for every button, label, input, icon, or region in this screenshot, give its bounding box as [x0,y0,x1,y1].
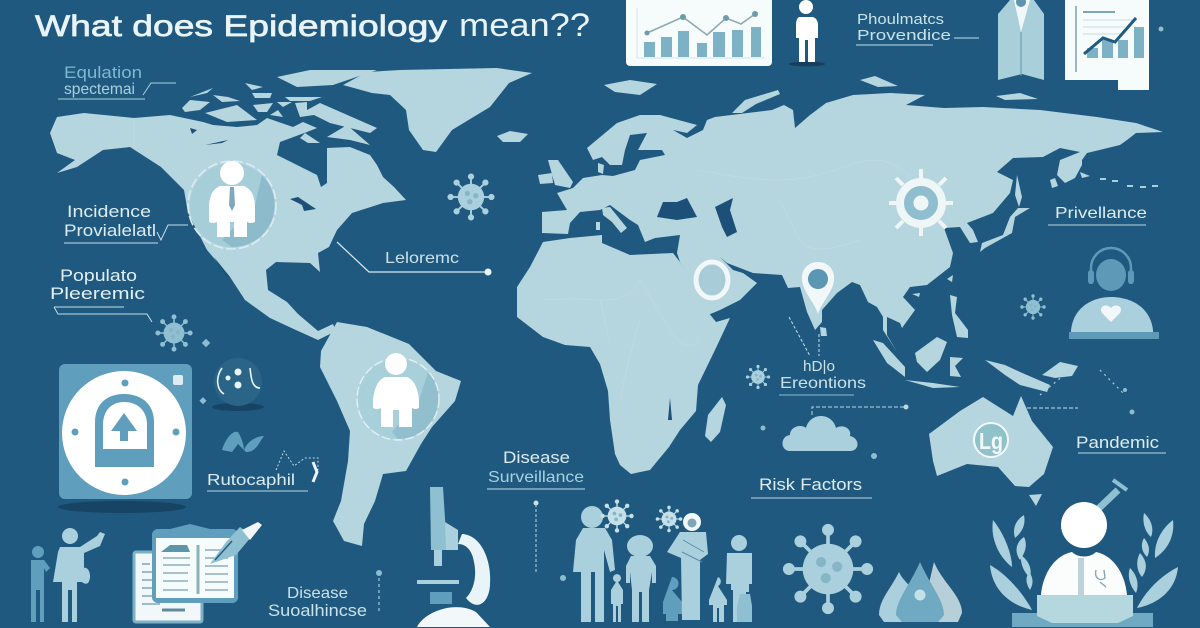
base [1037,595,1133,623]
tall person [53,528,105,622]
icon: Australia logo [974,423,1008,457]
landmass: Italy and Denmark [596,163,627,233]
label: Pandemic: Pandemic [1076,433,1160,452]
map borders [134,118,920,400]
icon: open notebooks and pen [134,522,262,622]
sea: Caspian [715,198,737,237]
icon: small virus above panel [156,315,192,351]
landmass: Tasmania [1029,494,1042,506]
child one [611,574,623,622]
label: Privellance: Privellance [1055,205,1147,222]
icon: map pin, India [802,262,834,314]
icon: virus near family two [656,506,682,532]
bandaged figure [667,513,708,620]
scattered dots [199,26,1163,581]
icon: microscope [417,487,490,627]
title [35,7,590,43]
head [1061,502,1107,548]
icon: small virus near Ereontions [746,365,770,389]
landmass: Greenland [343,68,532,152]
label: Leloremc with leader line: Leloremc [385,250,459,267]
label: Phoulmatcs Provendice [856,11,979,45]
label: hD|o Ereontions: Ereontions [780,375,866,392]
icon: location ring, Arabia [696,262,728,298]
label: Equlation spectemai: spectemai [64,81,135,98]
label: Phoulmatcs Provendice: Provendice [857,27,951,44]
icon: dark cell sample [212,358,264,411]
front sheet [152,524,238,603]
label: Disease Suoalhincse [268,570,382,620]
icon: water drops [879,562,962,622]
lab tool [1097,480,1127,510]
icon: person in circle, South America [357,353,439,440]
label: Disease Surveillance: Surveillance [488,469,584,486]
pen [210,522,262,564]
icon: lab coat [998,0,1044,80]
icon: cloud with dashed link [782,404,908,451]
landmass: Australia [929,396,1053,487]
label: Risk Factors [751,476,872,498]
label: hD|o Ereontions: hD|o [803,358,835,375]
landmass: Arctic Russia islands [604,76,1038,113]
label: Disease Surveillance [487,448,585,574]
bar series [644,27,761,57]
small person [31,546,50,622]
trend line [644,11,758,36]
label: Privellance [1048,205,1147,225]
icon: small virus, Philippine Sea [1021,295,1045,319]
icon: standing person [789,0,825,66]
landmass: Iceland [497,131,528,142]
icon: virus, North Atlantic [448,174,494,220]
adult one [573,506,615,622]
label: Rutocaphil [207,451,318,491]
label: Populato Pleeremic: Populato [60,266,137,285]
label: Disease Suoalhincse: Disease [287,585,348,602]
small child [737,594,752,622]
adult three [726,535,752,622]
label: Equlation spectemai [58,63,176,99]
icon: person with headset [1069,248,1159,339]
label: Incidence Provialelatl [64,202,188,243]
chart panel [626,0,772,66]
icon: gear virus over China [889,169,953,236]
icon: person in circle, North America [188,161,276,249]
label: Incidence Provialelatl: Provialelatl [64,221,156,240]
landmass: Africa [517,235,730,474]
label: hD|o Ereontions [779,317,866,395]
landmass: Arctic islands [182,70,377,145]
icon: virus near family one [601,500,633,532]
landmass: British Isles [538,160,573,188]
label: Disease Surveillance: Disease [503,448,570,467]
icon: doctor with leaves [990,480,1178,627]
world map [50,68,1163,546]
torso [1041,552,1127,595]
left leaves [990,515,1032,610]
label: Disease Suoalhincse: Suoalhincse [268,602,367,620]
icon: two people pointing [31,528,105,622]
icon: Australia logo: Lg [979,428,1003,454]
landmass: Eurasia [542,93,1163,352]
icon: large virus [785,526,871,612]
label: Incidence Provialelatl: Incidence [67,202,151,221]
title: mean?? [459,7,590,43]
label: Populato Pleeremic [50,266,152,322]
label: Risk Factors: Risk Factors [759,476,862,494]
right leaves [1129,513,1178,608]
back sheet [134,552,202,622]
landmass: Indonesia and Papua New Guinea [820,275,1078,392]
icon: blue lung shape [222,432,264,452]
label: Equlation spectemai: Equlation [64,63,142,82]
family of people [573,506,752,622]
child three [709,577,727,622]
dashed link, Australia to Pandemic [1027,407,1078,409]
landmass: South America [320,322,461,546]
lakes [190,128,672,420]
icon: report with rising chart [1065,0,1149,90]
landmass: Japan and Sakhalin [980,172,1090,252]
landmass: Madagascar [705,397,726,442]
panel: shield dial [58,364,192,513]
platform [1012,613,1153,627]
landmass: North America [50,113,406,340]
title: What does Epidemiology [35,10,447,43]
label: Leloremc with leader line [337,242,492,276]
label: Rutocaphil: Rutocaphil [207,472,295,489]
adult two [626,535,656,622]
sea: Black Sea [657,198,697,220]
label: Phoulmatcs Provendice: Phoulmatcs [857,11,944,28]
label: Populato Pleeremic: Pleeremic [50,284,146,303]
blue child [663,577,682,621]
